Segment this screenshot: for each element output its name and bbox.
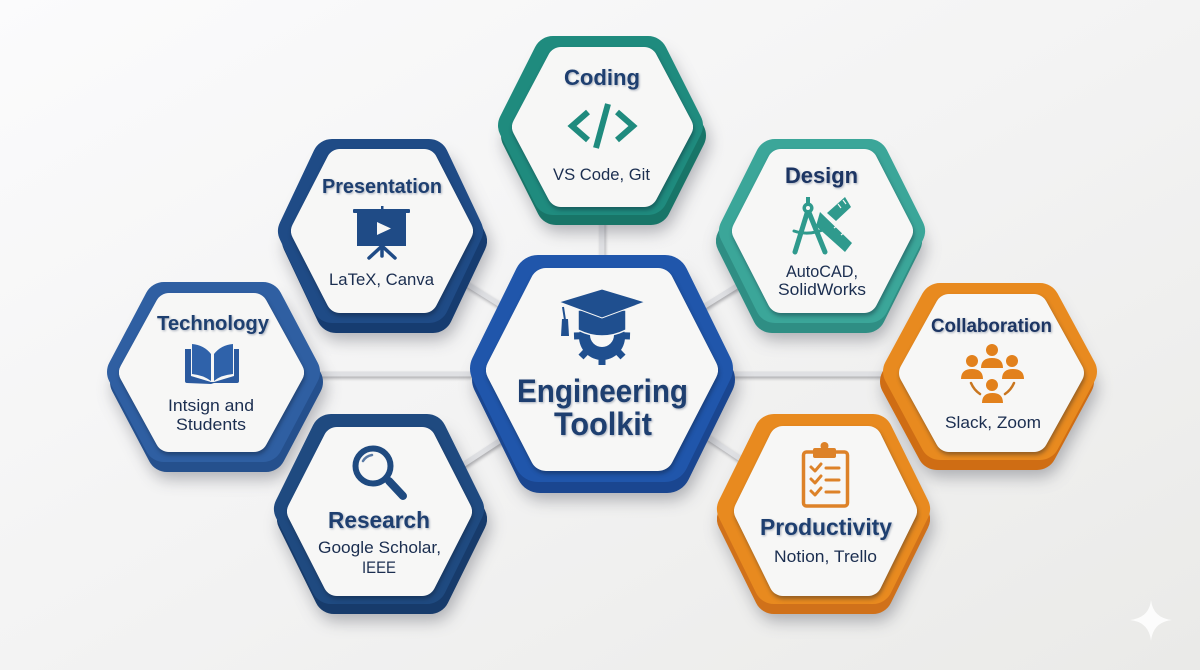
- panel: presentation: [298, 159, 467, 313]
- text: technology description: Intsign and: [168, 396, 254, 415]
- panel: research: [294, 434, 467, 594]
- heading: engineering toolkit: [517, 373, 688, 442]
- icon: magnifier: [356, 448, 403, 496]
- text: coding tools: VS Code, Git: [553, 165, 650, 184]
- heading: research: Research: [328, 507, 430, 533]
- text: presentation tools: LaTeX, Canva: [329, 270, 435, 289]
- icon: projector screen: [353, 206, 410, 258]
- heading: design: Design: [785, 163, 858, 188]
- heading: coding: Coding: [564, 65, 640, 90]
- text: research tools: IEEE: [362, 558, 396, 577]
- panel: productivity: [737, 434, 910, 594]
- text: technology description: [168, 396, 254, 434]
- heading: technology: Technology: [157, 313, 270, 335]
- heading: engineering toolkit: Engineering: [517, 373, 688, 409]
- text: design tools: AutoCAD,: [786, 262, 858, 281]
- icon: sparkle watermark: [1130, 600, 1172, 641]
- panel: design: [736, 159, 905, 313]
- panel: engineering toolkit hub: [494, 279, 711, 469]
- text: design tools: SolidWorks: [778, 280, 866, 299]
- icon: clipboard checklist: [804, 442, 848, 506]
- icon: team: [961, 344, 1024, 403]
- icon: open book: [185, 344, 239, 384]
- panel: collaboration: [900, 303, 1077, 450]
- icon: code brackets: [572, 104, 633, 148]
- heading: collaboration: Collaboration: [931, 316, 1052, 337]
- panel: technology: [127, 302, 303, 452]
- text: research tools: Google Scholar,: [318, 538, 441, 557]
- panel: coding: [518, 56, 686, 205]
- heading: productivity: Productivity: [760, 514, 892, 540]
- heading: engineering toolkit: Toolkit: [554, 406, 652, 442]
- text: research tools: [318, 538, 441, 577]
- icon: graduation cap and gear: [559, 289, 645, 365]
- heading: presentation: Presentation: [322, 176, 442, 198]
- text: technology description: Students: [176, 415, 246, 434]
- text: collaboration tools: Slack, Zoom: [945, 413, 1041, 432]
- text: design tools: [778, 262, 866, 299]
- icon: compass and set square: [794, 197, 852, 252]
- connectors: [315, 220, 890, 468]
- text: productivity tools: Notion, Trello: [774, 547, 877, 566]
